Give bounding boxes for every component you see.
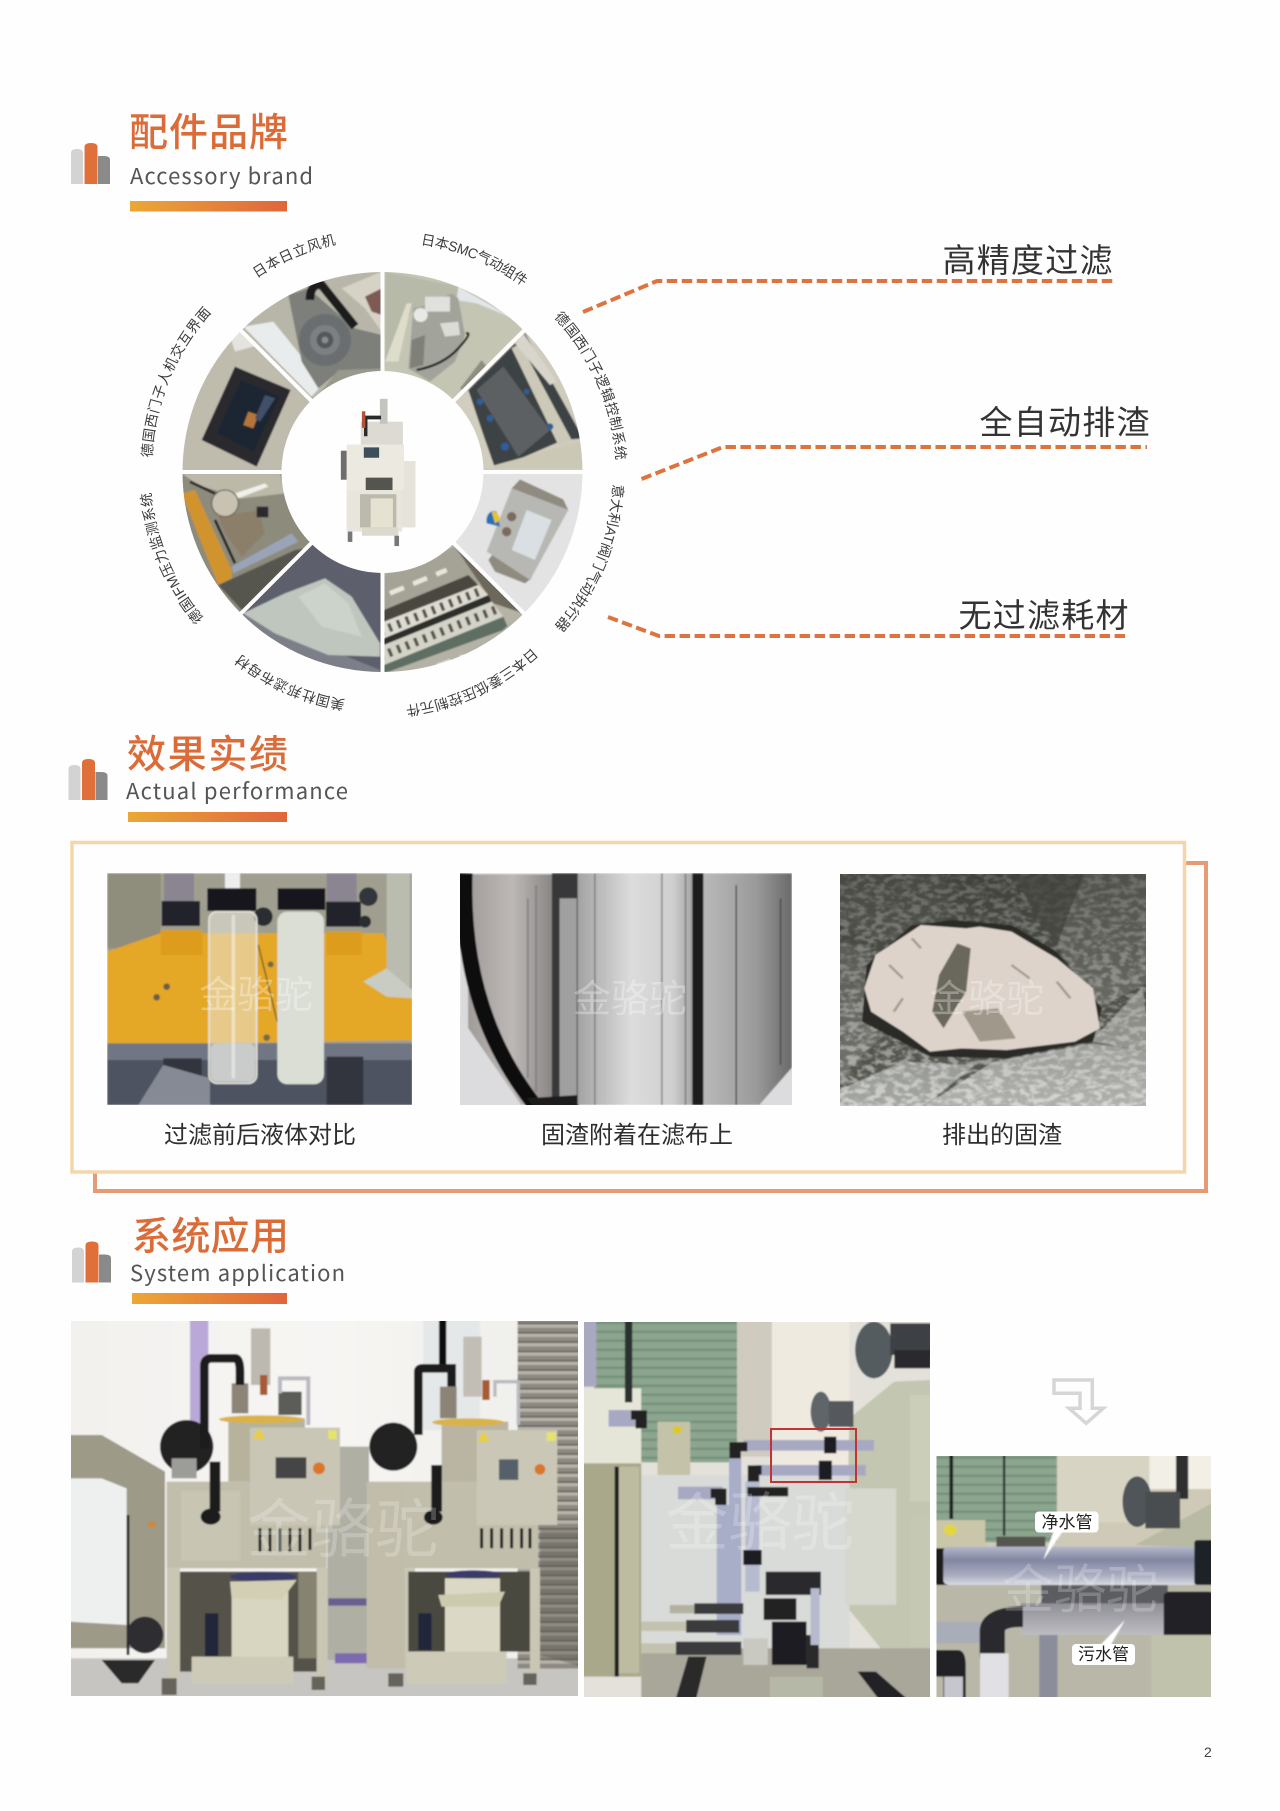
callout: high precision filtration	[583, 242, 1113, 312]
caption: 排出的固渣	[942, 1122, 1062, 1149]
segment: Siemens HMI	[182, 332, 310, 470]
photo: two filtration machines	[68, 1318, 582, 1698]
callout: automatic slag discharge	[642, 404, 1150, 479]
callout: no filter consumables: 无过滤耗材	[958, 597, 1128, 634]
ring labels: 日本SMC气动组件	[422, 234, 528, 285]
ring labels: 德国西门子逻辑控制系统	[554, 312, 628, 460]
front frame	[72, 842, 1184, 1172]
watermark: 金骆驼	[199, 975, 313, 1017]
callout: no filter consumables	[608, 597, 1128, 636]
subtitle: Accessory brand	[130, 159, 313, 191]
photo ring	[175, 265, 590, 683]
label: clean water pipe: 净水管	[1042, 1513, 1092, 1532]
icon: bent down arrow	[1054, 1380, 1103, 1423]
ring labels: 德国西门子人机交互界面	[140, 306, 212, 457]
results panel	[72, 842, 1206, 1191]
segment: Hitachi blower	[242, 272, 380, 399]
ring labels: 日本三菱低压控制元件	[406, 648, 538, 717]
watermark: 金骆驼	[1002, 1562, 1158, 1620]
machine 1	[160, 1328, 340, 1695]
title: 配件品牌	[129, 102, 288, 158]
segment: SMC pneumatic	[384, 272, 522, 400]
gradient underline	[128, 812, 287, 822]
photo: filter cloth	[457, 873, 794, 1107]
heading: accessory brand	[71, 102, 313, 212]
title: 系统应用	[132, 1206, 289, 1262]
title: 效果实绩	[127, 724, 288, 780]
watermark: 金骆驼	[247, 1494, 439, 1566]
segment: Mitsubishi breakers	[384, 544, 522, 672]
gradient underline	[130, 201, 287, 212]
label: sewage pipe: 污水管	[1078, 1645, 1129, 1664]
central machine	[341, 399, 415, 546]
watermark: 金骆驼	[573, 979, 687, 1021]
ring labels	[140, 234, 628, 717]
callout: high precision filtration: 高精度过滤	[942, 242, 1112, 279]
watermark: 金骆驼	[666, 1489, 854, 1559]
label bubble: clean water pipe	[1035, 1512, 1098, 1532]
centre hub	[282, 371, 484, 573]
caption: 过滤前后液体对比	[164, 1122, 356, 1149]
icon: bars	[72, 1242, 111, 1282]
photo: discharged solids	[835, 872, 1150, 1108]
page number: 2	[1204, 1744, 1212, 1760]
photo: piping between machines	[582, 1320, 933, 1698]
subtitle: Actual performance	[126, 774, 348, 806]
gradient underline	[132, 1293, 287, 1304]
icon: bars	[68, 759, 108, 800]
segment: DuPont granules	[242, 544, 380, 672]
segment: AT valve actuator	[456, 474, 582, 612]
segment dividers	[180, 270, 585, 674]
photo: close-up of water pipes	[933, 1453, 1215, 1700]
red highlight box	[771, 1429, 856, 1482]
caption: 固渣附着在滤布上	[541, 1122, 733, 1149]
label bubble: sewage pipe	[1072, 1644, 1135, 1665]
segment: Siemens PLC	[456, 332, 582, 470]
ring labels: 意大利AT阀门气动执行器	[554, 484, 625, 632]
heading: actual performance	[68, 724, 348, 822]
ring labels: 德国IFM压力监测系统	[140, 493, 204, 624]
watermark: 金骆驼	[930, 979, 1044, 1021]
heading: system application	[72, 1206, 345, 1304]
segment: IFM pressure monitor	[182, 474, 310, 612]
photo: bottles comparison	[107, 873, 412, 1105]
wheel diagram of accessories	[140, 234, 628, 717]
callout: automatic slag discharge: 全自动排渣	[980, 404, 1150, 441]
icon: bars	[71, 143, 110, 184]
machine 2	[367, 1337, 557, 1687]
subtitle: System application	[130, 1256, 345, 1288]
ring labels: 美国杜邦滤布母材	[234, 654, 345, 711]
ring labels: 日本日立风机	[253, 234, 336, 278]
back frame	[95, 863, 1206, 1191]
